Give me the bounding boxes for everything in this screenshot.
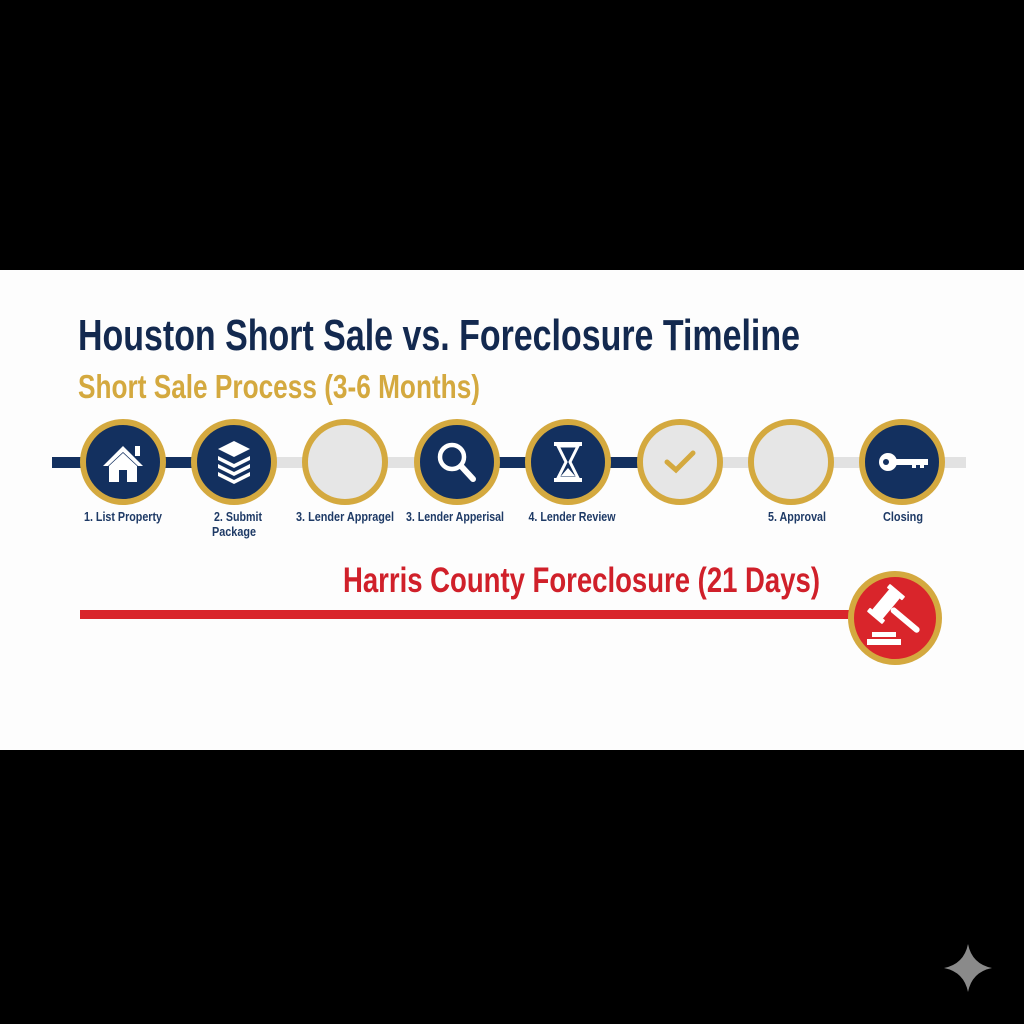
step 2: submit package [194, 422, 274, 539]
icon: gavel circle [851, 574, 939, 662]
step 3b: lender apperisal [406, 422, 504, 524]
step 4: lender review [528, 422, 616, 524]
heading: harris county foreclosure: Harris County Foreclosure (21 Days) [343, 561, 820, 600]
icon: key [879, 453, 928, 471]
step 1: list property [83, 422, 163, 524]
step 5: approval [751, 422, 831, 524]
subtitle: short sale process: Short Sale Process (3-6 Months) [78, 368, 480, 405]
step 2: submit package: Package [212, 524, 256, 539]
step 2: submit package: 2. Submit [214, 509, 263, 524]
step 3: lender appragel: 3. Lender Appragel [296, 509, 394, 524]
step 5: approval: 5. Approval [768, 509, 826, 524]
icon: checkmark [667, 453, 693, 470]
title: Houston Short Sale vs. Foreclosure Timeline [78, 311, 800, 360]
icon: magnifier [440, 445, 473, 479]
step 1: list property: 1. List Property [84, 509, 163, 524]
step 3: lender appragel [296, 422, 394, 524]
step: check [640, 422, 720, 502]
icon: stack [218, 441, 250, 484]
icon: house [103, 446, 143, 482]
icon: corner sparkle [944, 944, 992, 992]
timeline track [52, 457, 966, 468]
foreclosure red line [80, 610, 855, 619]
step 4: lender review: 4. Lender Review [528, 509, 616, 524]
panel: white content band [0, 270, 1024, 750]
step 3b: lender apperisal: 3. Lender Apperisal [406, 509, 504, 524]
icon: hourglass [554, 442, 582, 482]
step: closing [862, 422, 942, 524]
step: closing: Closing [883, 509, 923, 524]
